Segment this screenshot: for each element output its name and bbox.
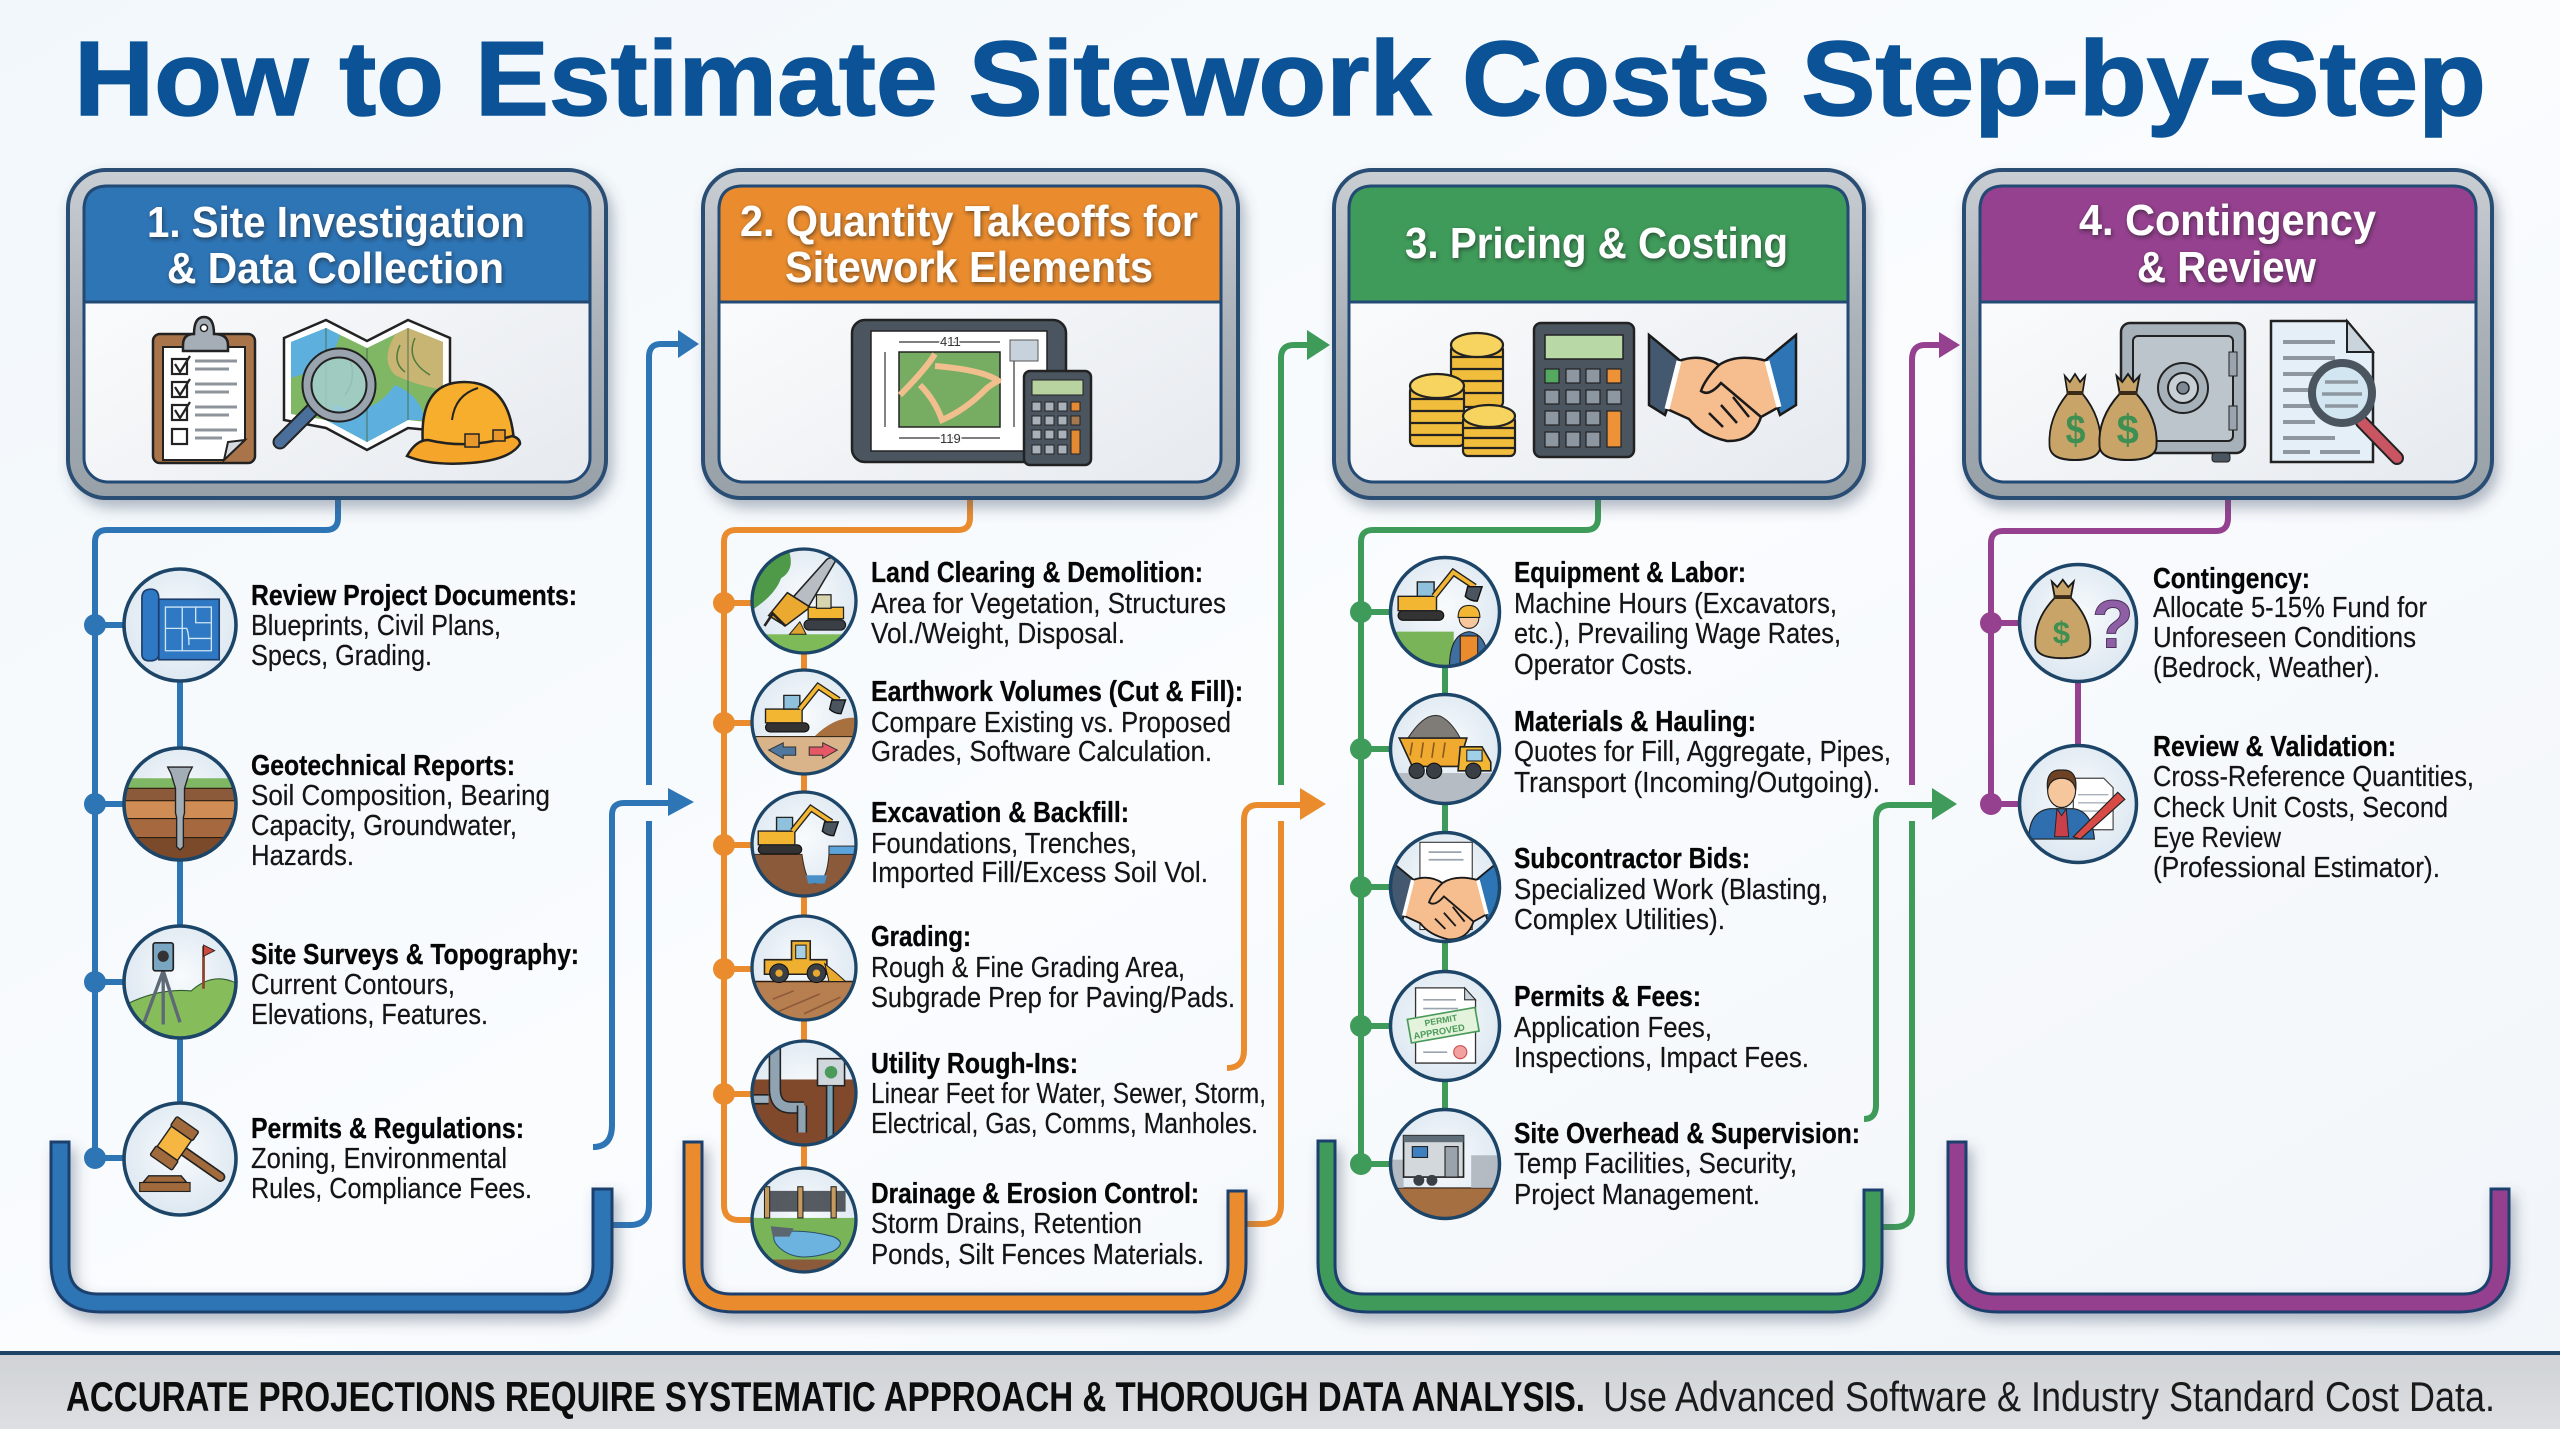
step heading and text: Equipment & Labor: Operator Costs. xyxy=(1514,649,1693,681)
step heading and text: Site Surveys & Topography: Elevations, Features. xyxy=(251,999,488,1031)
panel 4 header xyxy=(1980,186,2476,302)
step heading and text: Permits & Regulations: Rules, Compliance Fees. xyxy=(251,1173,532,1205)
step heading and text: Review & Validation: Cross-Reference Quantities, xyxy=(2153,761,2474,793)
step heading and text: Utility Rough-Ins xyxy=(871,1048,1266,1140)
panel 1 heading xyxy=(147,198,525,293)
step heading and text: Geotechnical Reports: Geotechnical Reports: xyxy=(251,750,515,782)
icon: money bags: $ xyxy=(2117,406,2139,453)
icon: handshake xyxy=(1649,335,1796,441)
icon: money bag and question mark: ? xyxy=(2092,588,2133,663)
panel 4 heading xyxy=(2079,196,2376,292)
step heading and text: Subcontractor Bids: Specialized Work (Blasting, xyxy=(1514,874,1828,906)
step heading and text: Contingency: Allocate 5-15% Fund for xyxy=(2153,592,2427,624)
connector dots: column 4 xyxy=(1980,612,2002,815)
step heading and text: Permits & Regulations: Permits & Regulations: xyxy=(251,1113,524,1145)
connector lines: column 2 xyxy=(724,498,1302,1224)
icon: magnifier xyxy=(280,353,371,442)
icon: approved permit: PERMIT xyxy=(1424,1012,1459,1028)
column 3 steps xyxy=(1388,557,1891,1221)
icon: money bag and question mark xyxy=(2020,564,2136,682)
panel 1 header xyxy=(84,186,590,302)
step heading and text: Materials & Hauling xyxy=(1514,706,1891,799)
step heading and text: Geotechnical Reports: Capacity, Groundwater, xyxy=(251,810,517,842)
icon: hard hat xyxy=(407,382,520,464)
connector upper link into panel 4 xyxy=(1912,345,1940,785)
icon: document with magnifier xyxy=(2271,321,2397,462)
step heading and text: Grading: Rough & Fine Grading Area, xyxy=(871,952,1185,984)
step heading and text: Geotechnical Reports xyxy=(251,750,550,872)
icon: coin stacks xyxy=(1410,333,1515,456)
step heading and text: Drainage & Erosion Control: Storm Drains, Retention xyxy=(871,1208,1142,1240)
step heading and text: Site Overhead & Supervision: Temp Facilities, Security, xyxy=(1514,1148,1797,1180)
connector upper link into panel 3 xyxy=(1281,345,1308,785)
step heading and text: Earthwork Volumes: Grades, Software Calculation. xyxy=(871,736,1212,768)
step heading and text: Site Surveys & Topography xyxy=(251,939,579,1031)
icon: blueprint xyxy=(124,569,236,681)
step heading and text: Contingency: (Bedrock, Weather). xyxy=(2153,652,2380,684)
icon: tablet with site plan: 119 xyxy=(940,431,961,446)
panel 1: Site Investigation xyxy=(68,170,606,498)
icon: chainsaw and dozer xyxy=(750,549,858,655)
step heading and text: Subcontractor Bids xyxy=(1514,843,1828,936)
icon: site trailer and fence xyxy=(1388,1110,1504,1221)
footer bar xyxy=(0,1351,2560,1429)
icon: utility pipes xyxy=(750,1039,858,1147)
step heading and text: Contingency: Contingency: xyxy=(2153,563,2310,595)
panel 1 heading: & Data Collection xyxy=(167,244,504,293)
step heading and text: Review & Validation: Check Unit Costs, Second xyxy=(2153,792,2448,824)
icon: money bags xyxy=(2049,374,2157,460)
panel 4 heading: & Review xyxy=(2137,243,2317,292)
panel 1 heading: 1. Site Investigation xyxy=(147,198,525,247)
icon: excavator and worker xyxy=(1388,558,1500,669)
step heading and text: Equipment & Labor: Machine Hours (Excavators, xyxy=(1514,588,1837,620)
step heading and text: Equipment & Labor: Equipment & Labor: xyxy=(1514,557,1746,589)
step heading and text: Review & Validation: (Professional Estimator). xyxy=(2153,852,2440,884)
step heading and text: Earthwork Volumes: Earthwork Volumes (Cut & Fill): xyxy=(871,676,1243,708)
icon: money bags: $ xyxy=(2066,407,2086,454)
step heading and text: Land Clearing: Area for Vegetation, Structures xyxy=(871,588,1226,620)
step heading and text: Earthwork Volumes xyxy=(871,676,1243,768)
step heading and text: Review & Validation: Review & Validation: xyxy=(2153,731,2396,763)
step heading and text: Review Project Documents xyxy=(251,580,577,672)
icon: excavator cut and fill xyxy=(750,670,858,778)
icon: silt fence and pond xyxy=(750,1168,858,1275)
icon: money bag and question mark: $ xyxy=(2053,616,2070,651)
step heading and text: Geotechnical Reports: Hazards. xyxy=(251,840,354,872)
footer bold statement: ACCURATE PROJECTIONS REQUIRE SYSTEMATIC APPROACH & THOROUGH DATA ANALYSIS. xyxy=(66,1373,1585,1420)
step heading and text: Grading: Grading: xyxy=(871,921,971,953)
panel 3: Pricing & Costing xyxy=(1334,170,1864,498)
step heading and text: Drainage & Erosion Control: Drainage & Erosion Control: xyxy=(871,1178,1199,1210)
bracket: column 2 xyxy=(684,1142,1246,1312)
panel 3 header xyxy=(1349,186,1848,302)
step heading and text: Excavation & Backfill xyxy=(871,797,1208,889)
panel 2 heading: 2. Quantity Takeoffs for xyxy=(740,197,1198,246)
panel 4: Contingency & Review xyxy=(1964,170,2492,498)
connector dots and arrows: column 2 xyxy=(713,330,1330,1105)
icon: safe xyxy=(2121,323,2245,462)
panel 2 heading: Sitework Elements xyxy=(785,243,1153,292)
step heading and text: Site Overhead & Supervision: Site Overhead & Supervision: xyxy=(1514,1118,1860,1150)
connector dots and arrows: column 1 xyxy=(84,330,699,1169)
column 2 steps xyxy=(750,549,1266,1275)
step heading and text: Permits & Regulations xyxy=(251,1113,532,1205)
step heading and text: Permits & Regulations: Zoning, Environmental xyxy=(251,1143,507,1175)
step heading and text: Excavation & Backfill: Excavation & Backfill: xyxy=(871,797,1129,829)
connector lines: column 4 xyxy=(1991,498,2228,804)
step heading and text: Excavation & Backfill: Foundations, Trenches, xyxy=(871,828,1137,860)
icon: estimator reviewing document xyxy=(2020,746,2136,862)
step heading and text: Review & Validation: Eye Review xyxy=(2153,822,2282,854)
step heading and text: Land Clearing: Vol./Weight, Disposal. xyxy=(871,618,1125,650)
step heading and text: Geotechnical Reports: Soil Composition, Bearing xyxy=(251,780,550,812)
bracket: column 1 xyxy=(51,1142,612,1312)
step heading and text: Site Surveys & Topography: Site Surveys & Topography: xyxy=(251,939,579,971)
column 4 steps xyxy=(2020,563,2474,884)
connector lines: column 1 xyxy=(95,344,680,1225)
step heading and text: Equipment & Labor: etc.), Prevailing Wage Rates, xyxy=(1514,618,1841,650)
step heading and text: Grading: Subgrade Prep for Paving/Pads. xyxy=(871,982,1235,1014)
step heading and text: Equipment & Labor xyxy=(1514,557,1841,681)
panel 2 header xyxy=(719,186,1221,302)
step heading and text: Earthwork Volumes: Compare Existing vs. Proposed xyxy=(871,707,1231,739)
step heading and text: Permits & Fees: Application Fees, xyxy=(1514,1012,1712,1044)
step heading and text: Utility Rough-Ins: Utility Rough-Ins: xyxy=(871,1048,1078,1080)
step heading and text: Materials & Hauling: Materials & Hauling: xyxy=(1514,706,1756,738)
step heading and text: Subcontractor Bids: Complex Utilities). xyxy=(1514,904,1725,936)
icon: clipboard xyxy=(153,317,255,463)
step heading and text: Subcontractor Bids: Subcontractor Bids: xyxy=(1514,843,1750,875)
panel 4 heading: 4. Contingency xyxy=(2079,196,2376,245)
icon: survey instrument and flag xyxy=(122,926,238,1040)
icon: tablet with site plan xyxy=(852,320,1066,462)
step heading and text: Excavation & Backfill: Imported Fill/Excess Soil Vol. xyxy=(871,857,1208,889)
step heading and text: Grading xyxy=(871,921,1235,1014)
icon: gavel xyxy=(124,1103,236,1215)
icon: dump truck xyxy=(1388,694,1502,806)
step heading and text: Land Clearing: Land Clearing & Demolition: xyxy=(871,557,1203,589)
step heading and text: Review & Validation xyxy=(2153,731,2474,884)
step heading and text: Permits & Fees: Inspections, Impact Fees. xyxy=(1514,1042,1809,1074)
connector lines: column 3 xyxy=(1361,498,1935,1227)
step heading and text: Materials & Hauling: Quotes for Fill, Aggregate, Pipes, xyxy=(1514,736,1891,768)
step heading and text: Land Clearing xyxy=(871,557,1226,650)
icon: calculator xyxy=(1024,371,1091,465)
step heading and text: Permits & Fees xyxy=(1514,981,1809,1074)
column 1 steps xyxy=(122,569,579,1215)
connector dots and arrows: column 3 xyxy=(1350,332,1960,1175)
step heading and text: Site Surveys & Topography: Current Contours, xyxy=(251,969,455,1001)
icon: calculator xyxy=(1534,323,1634,457)
step heading and text: Drainage & Erosion Control: Ponds, Silt Fences Materials. xyxy=(871,1239,1204,1271)
step heading and text: Utility Rough-Ins: Linear Feet for Water, Sewer, Storm, xyxy=(871,1078,1266,1110)
icon: approved permit xyxy=(1390,972,1500,1080)
step heading and text: Site Overhead & Supervision: Project Management. xyxy=(1514,1179,1760,1211)
bracket: column 4 xyxy=(1948,1142,2509,1312)
icon: soil layers and probe xyxy=(124,748,236,862)
icon: approved permit: APPROVED xyxy=(1413,1022,1466,1041)
step heading and text: Utility Rough-Ins: Electrical, Gas, Comms, Manholes. xyxy=(871,1108,1258,1140)
step heading and text: Site Overhead & Supervision xyxy=(1514,1118,1860,1211)
bracket: column 3 xyxy=(1318,1141,1882,1312)
step heading and text: Permits & Fees: Permits & Fees: xyxy=(1514,981,1701,1013)
title: How to Estimate Sitework Costs Step-by-Step xyxy=(74,20,2486,138)
icon: topographic map xyxy=(284,320,450,450)
step heading and text: Review Project Documents: Blueprints, Civil Plans, xyxy=(251,610,501,642)
icon: handshake over contract xyxy=(1390,832,1500,942)
panel 2 heading xyxy=(740,197,1198,292)
panel 3 heading: 3. Pricing & Costing xyxy=(1405,219,1788,268)
panel 2: Quantity Takeoffs xyxy=(703,170,1238,498)
icon: wheel loader on graded ground xyxy=(750,916,858,1023)
step heading and text: Contingency: Unforeseen Conditions xyxy=(2153,622,2416,654)
step heading and text: Review Project Documents: Specs, Grading. xyxy=(251,640,432,672)
icon: tablet with site plan: 411 xyxy=(940,334,961,349)
step heading and text: Drainage & Erosion Control xyxy=(871,1178,1204,1271)
step heading and text: Review Project Documents: Review Project Documents: xyxy=(251,580,577,612)
step heading and text: Materials & Hauling: Transport (Incoming/Outgoing). xyxy=(1514,767,1880,799)
icon: excavator and trench xyxy=(750,792,858,898)
step heading and text: Contingency xyxy=(2153,563,2427,684)
